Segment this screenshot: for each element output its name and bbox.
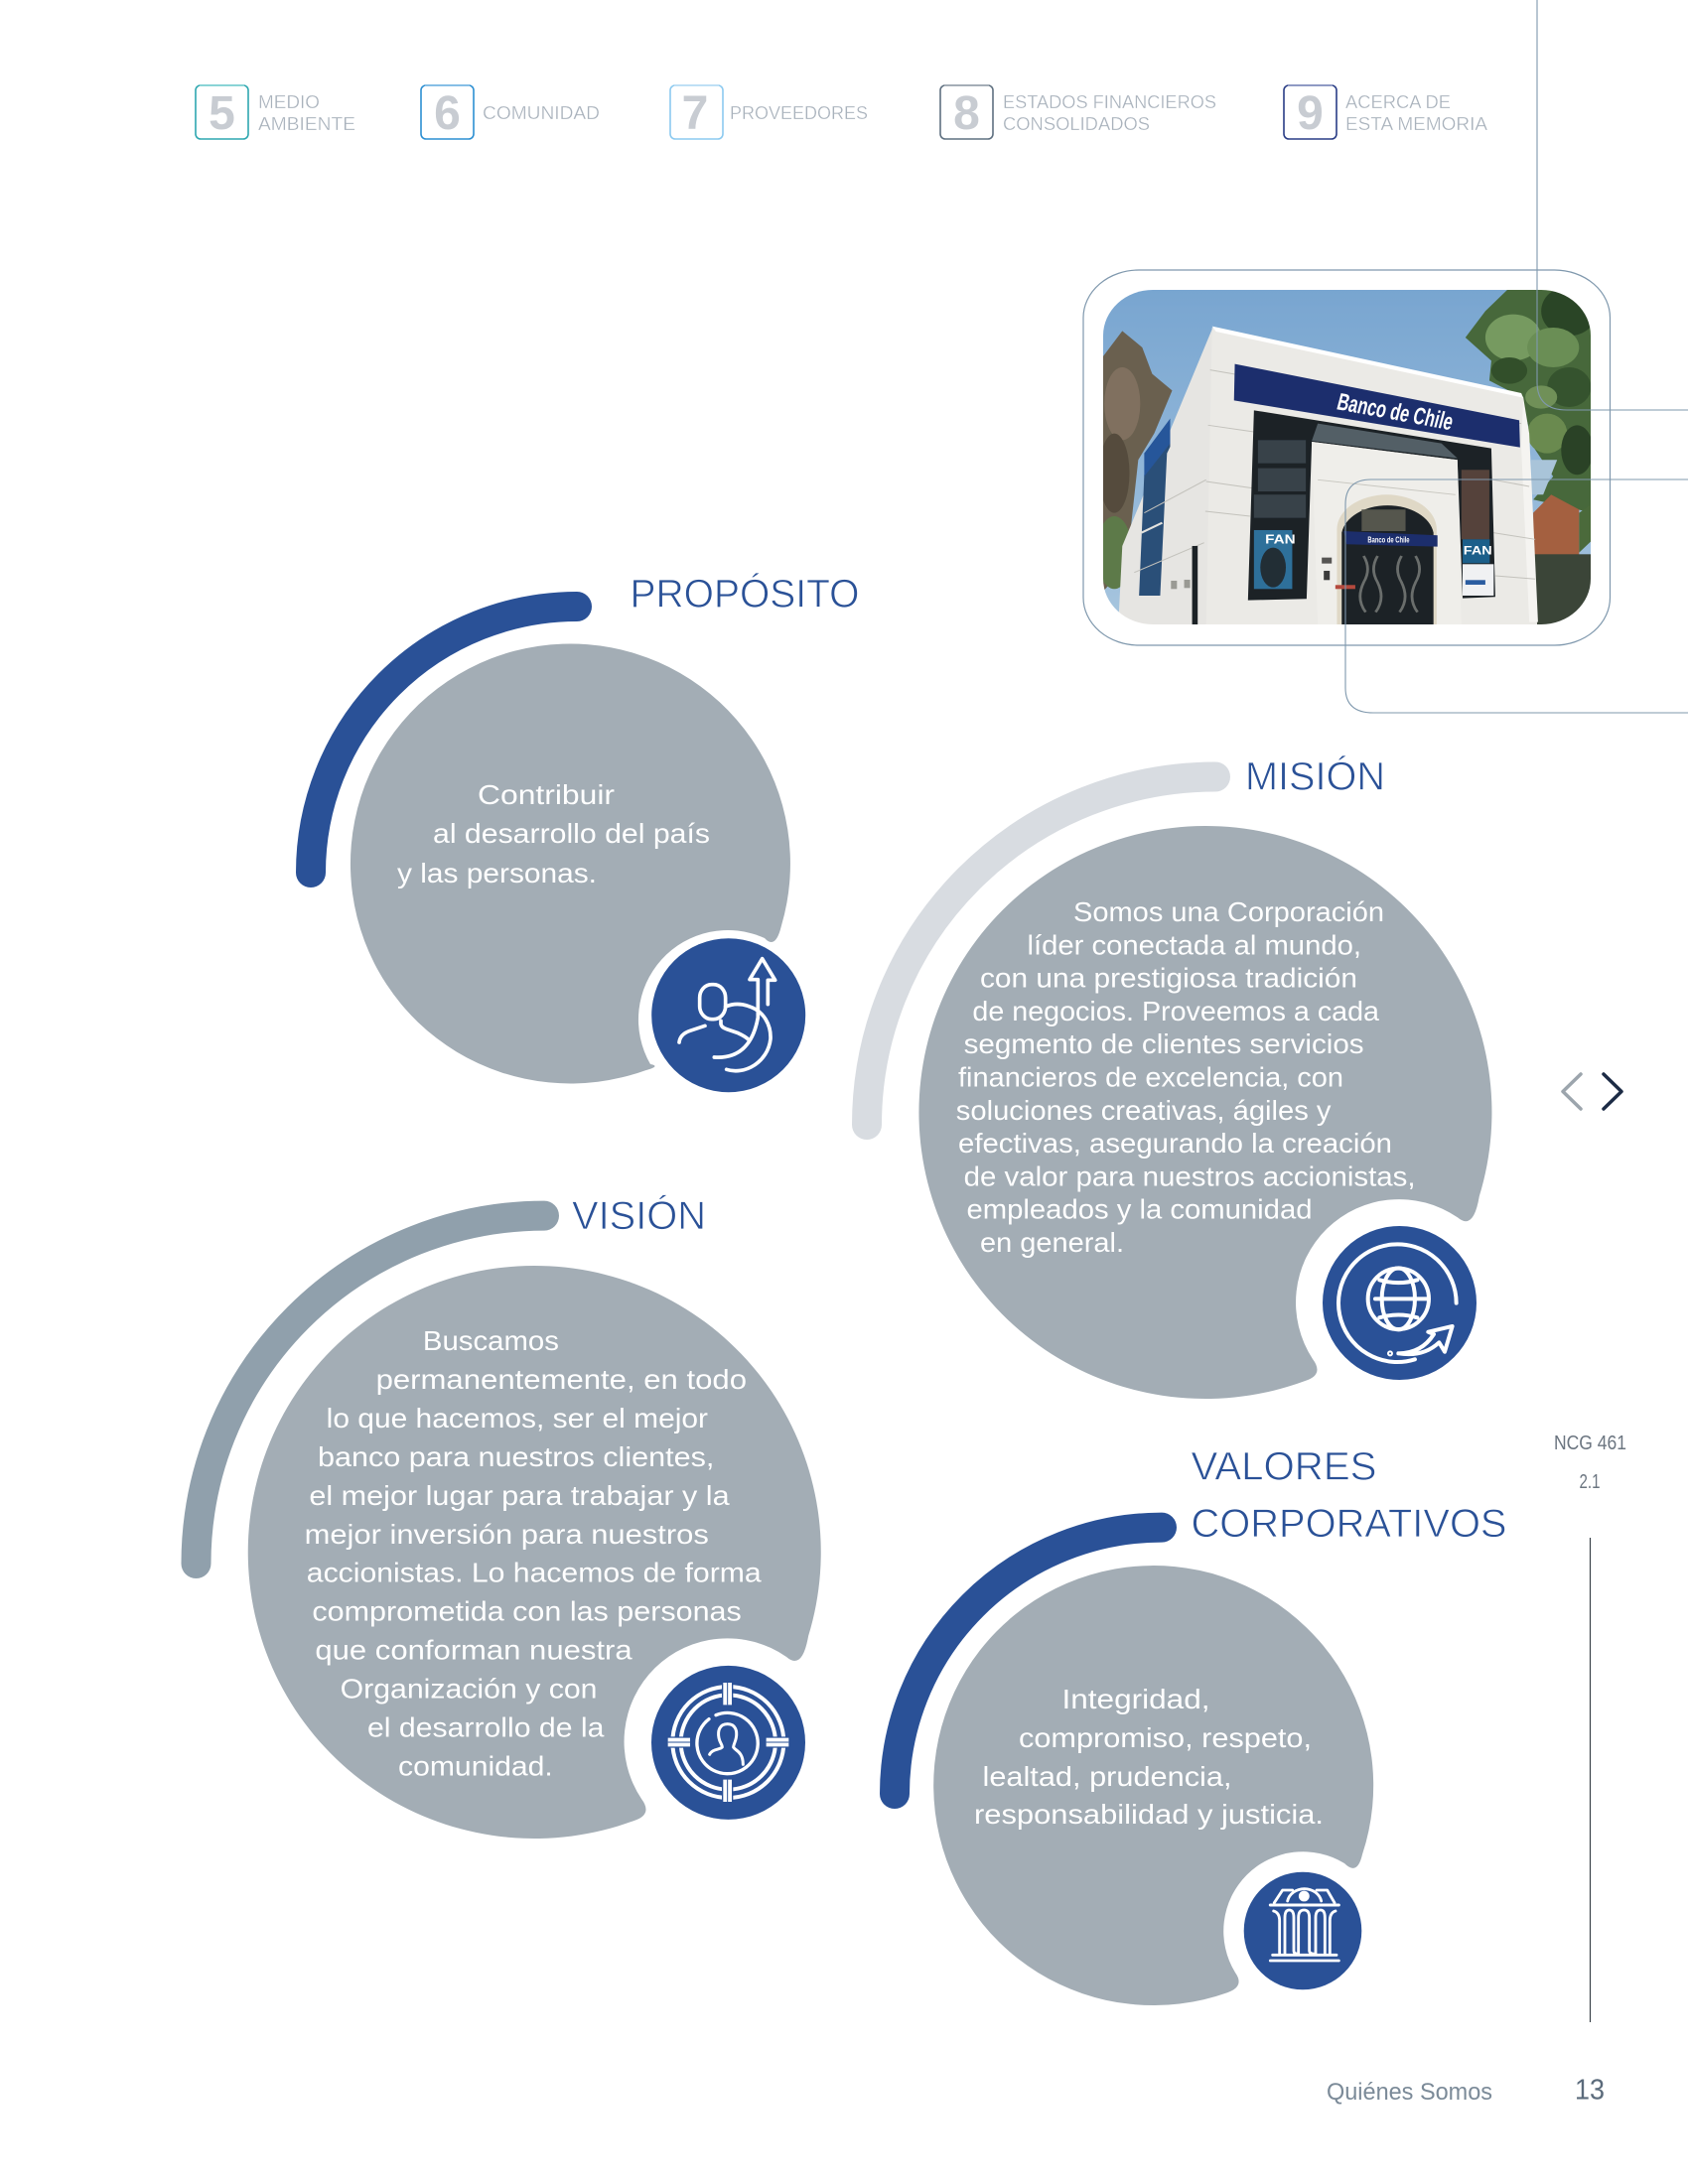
arc: misión [867,776,1215,1125]
text: misión: segmento de clientes servicios [964,1028,1364,1059]
nav item 9: ACERCA DE [1345,92,1451,112]
heading: propósito: PROPÓSITO [630,572,860,615]
text: visión: lo que hacemos, ser el mejor [327,1403,708,1433]
icon: bank building [1244,1872,1361,1989]
text: valores: Integridad, [1062,1684,1209,1714]
text: visión [305,1325,762,1781]
text: visión: banco para nuestros clientes, [318,1441,714,1472]
icon: globe with arrow [1323,1226,1477,1380]
navigation bar [196,85,1487,140]
text: visión: Organización y con [341,1674,598,1704]
nav item 7: 7 [682,87,708,140]
nav item 6: 6 [434,87,461,140]
nav item 5: MEDIO [258,92,320,112]
text: visión: comprometida con las personas [312,1596,742,1627]
footer section name: Quiénes Somos [1327,2079,1492,2106]
nav item 5: 5 [209,87,235,140]
text: misión: líder conectada al mundo, [1027,929,1361,960]
photo: bank branch building: FAN [1464,543,1492,557]
text: misión: financieros de excelencia, con [958,1062,1343,1092]
nav item 8: ESTADOS FINANCIEROS [1003,92,1216,112]
text: propósito: y las personas. [397,858,597,888]
arc: visión [197,1216,544,1564]
text: propósito [397,779,710,888]
decorative lines [1345,0,1688,713]
photo frame [1083,270,1611,645]
nav item 6 [421,85,600,140]
photo: bank branch building [1096,286,1597,628]
text: valores: responsabilidad y justicia. [974,1799,1324,1830]
text: visión: Buscamos [423,1325,559,1356]
text: misión [956,896,1416,1258]
bubble: visión [248,1266,821,1839]
reference: NCG 461: NCG 461 [1554,1433,1626,1454]
heading: valores corporativos: VALORES [1192,1445,1376,1489]
panel: propósito [311,572,860,1092]
heading: valores corporativos [1192,1445,1507,1546]
navigation arrow: next [1604,1074,1621,1109]
text: visión: accionistas. Lo hacemos de forma [307,1558,762,1588]
nav item 6: COMUNIDAD [483,103,600,123]
reference: 2.1: 2.1 [1579,1471,1601,1493]
arc: valores [895,1528,1162,1794]
text: misión: empleados y la comunidad [967,1194,1313,1225]
vertical rule [1589,1538,1591,2022]
panel: valores corporativos [895,1445,1507,2005]
text: visión: que conforman nuestra [315,1635,633,1666]
text: visión: el desarrollo de la [367,1711,605,1743]
text: visión: mejor inversión para nuestros [305,1519,709,1550]
text: propósito: Contribuir [478,779,615,810]
nav item 9 [1284,85,1487,140]
text: valores: compromiso, respeto, [1019,1722,1312,1753]
navigation arrow: previous [1563,1074,1581,1109]
bubble: propósito [351,643,790,1083]
page number: 13 [1575,2075,1605,2107]
nav item 5: AMBIENTE [258,114,355,134]
heading: visión: VISIÓN [572,1193,706,1238]
nav item 9: ESTA MEMORIA [1345,114,1487,134]
bubble: misión [918,826,1491,1399]
text: misión: de valor para nuestros accionistas, [964,1160,1416,1191]
text: visión: el mejor lugar para trabajar y la [309,1480,730,1511]
text: visión: permanentemente, en todo [376,1364,747,1395]
nav item 8 [940,85,1216,140]
bubble: valores [933,1566,1373,2005]
panel: visión [197,1193,821,1839]
arc: propósito [311,607,577,873]
text: misión: Somos una Corporación [1073,896,1384,927]
heading: valores corporativos: CORPORATIVOS [1192,1502,1507,1546]
photo: bank branch building: Banco de Chile [1367,535,1410,545]
nav item 9: 9 [1297,87,1324,140]
text: misión: efectivas, asegurando la creación [958,1128,1392,1159]
icon: person with upward arrow [651,938,805,1092]
text: visión: comunidad. [398,1750,553,1781]
text: misión: en general. [980,1227,1124,1258]
icon: person in target [651,1666,805,1820]
heading: misión: MISIÓN [1245,754,1385,798]
nav item 8: CONSOLIDADOS [1003,114,1150,134]
nav item 8: 8 [953,87,980,140]
nav item 7 [670,85,868,140]
nav item 7: PROVEEDORES [730,103,868,123]
photo: bank branch building: FAN [1265,532,1296,546]
text: misión: de negocios. Proveemos a cada [972,996,1379,1026]
photo: bank branch building: Banco de Chile [1335,388,1457,436]
text: misión: con una prestigiosa tradición [980,963,1357,994]
panel: misión [867,754,1491,1399]
text: propósito: al desarrollo del país [433,818,710,849]
text: valores [974,1684,1324,1830]
text: misión: soluciones creativas, ágiles y [956,1095,1331,1126]
text: valores: lealtad, prudencia, [983,1761,1231,1792]
nav item 5 [196,85,355,140]
